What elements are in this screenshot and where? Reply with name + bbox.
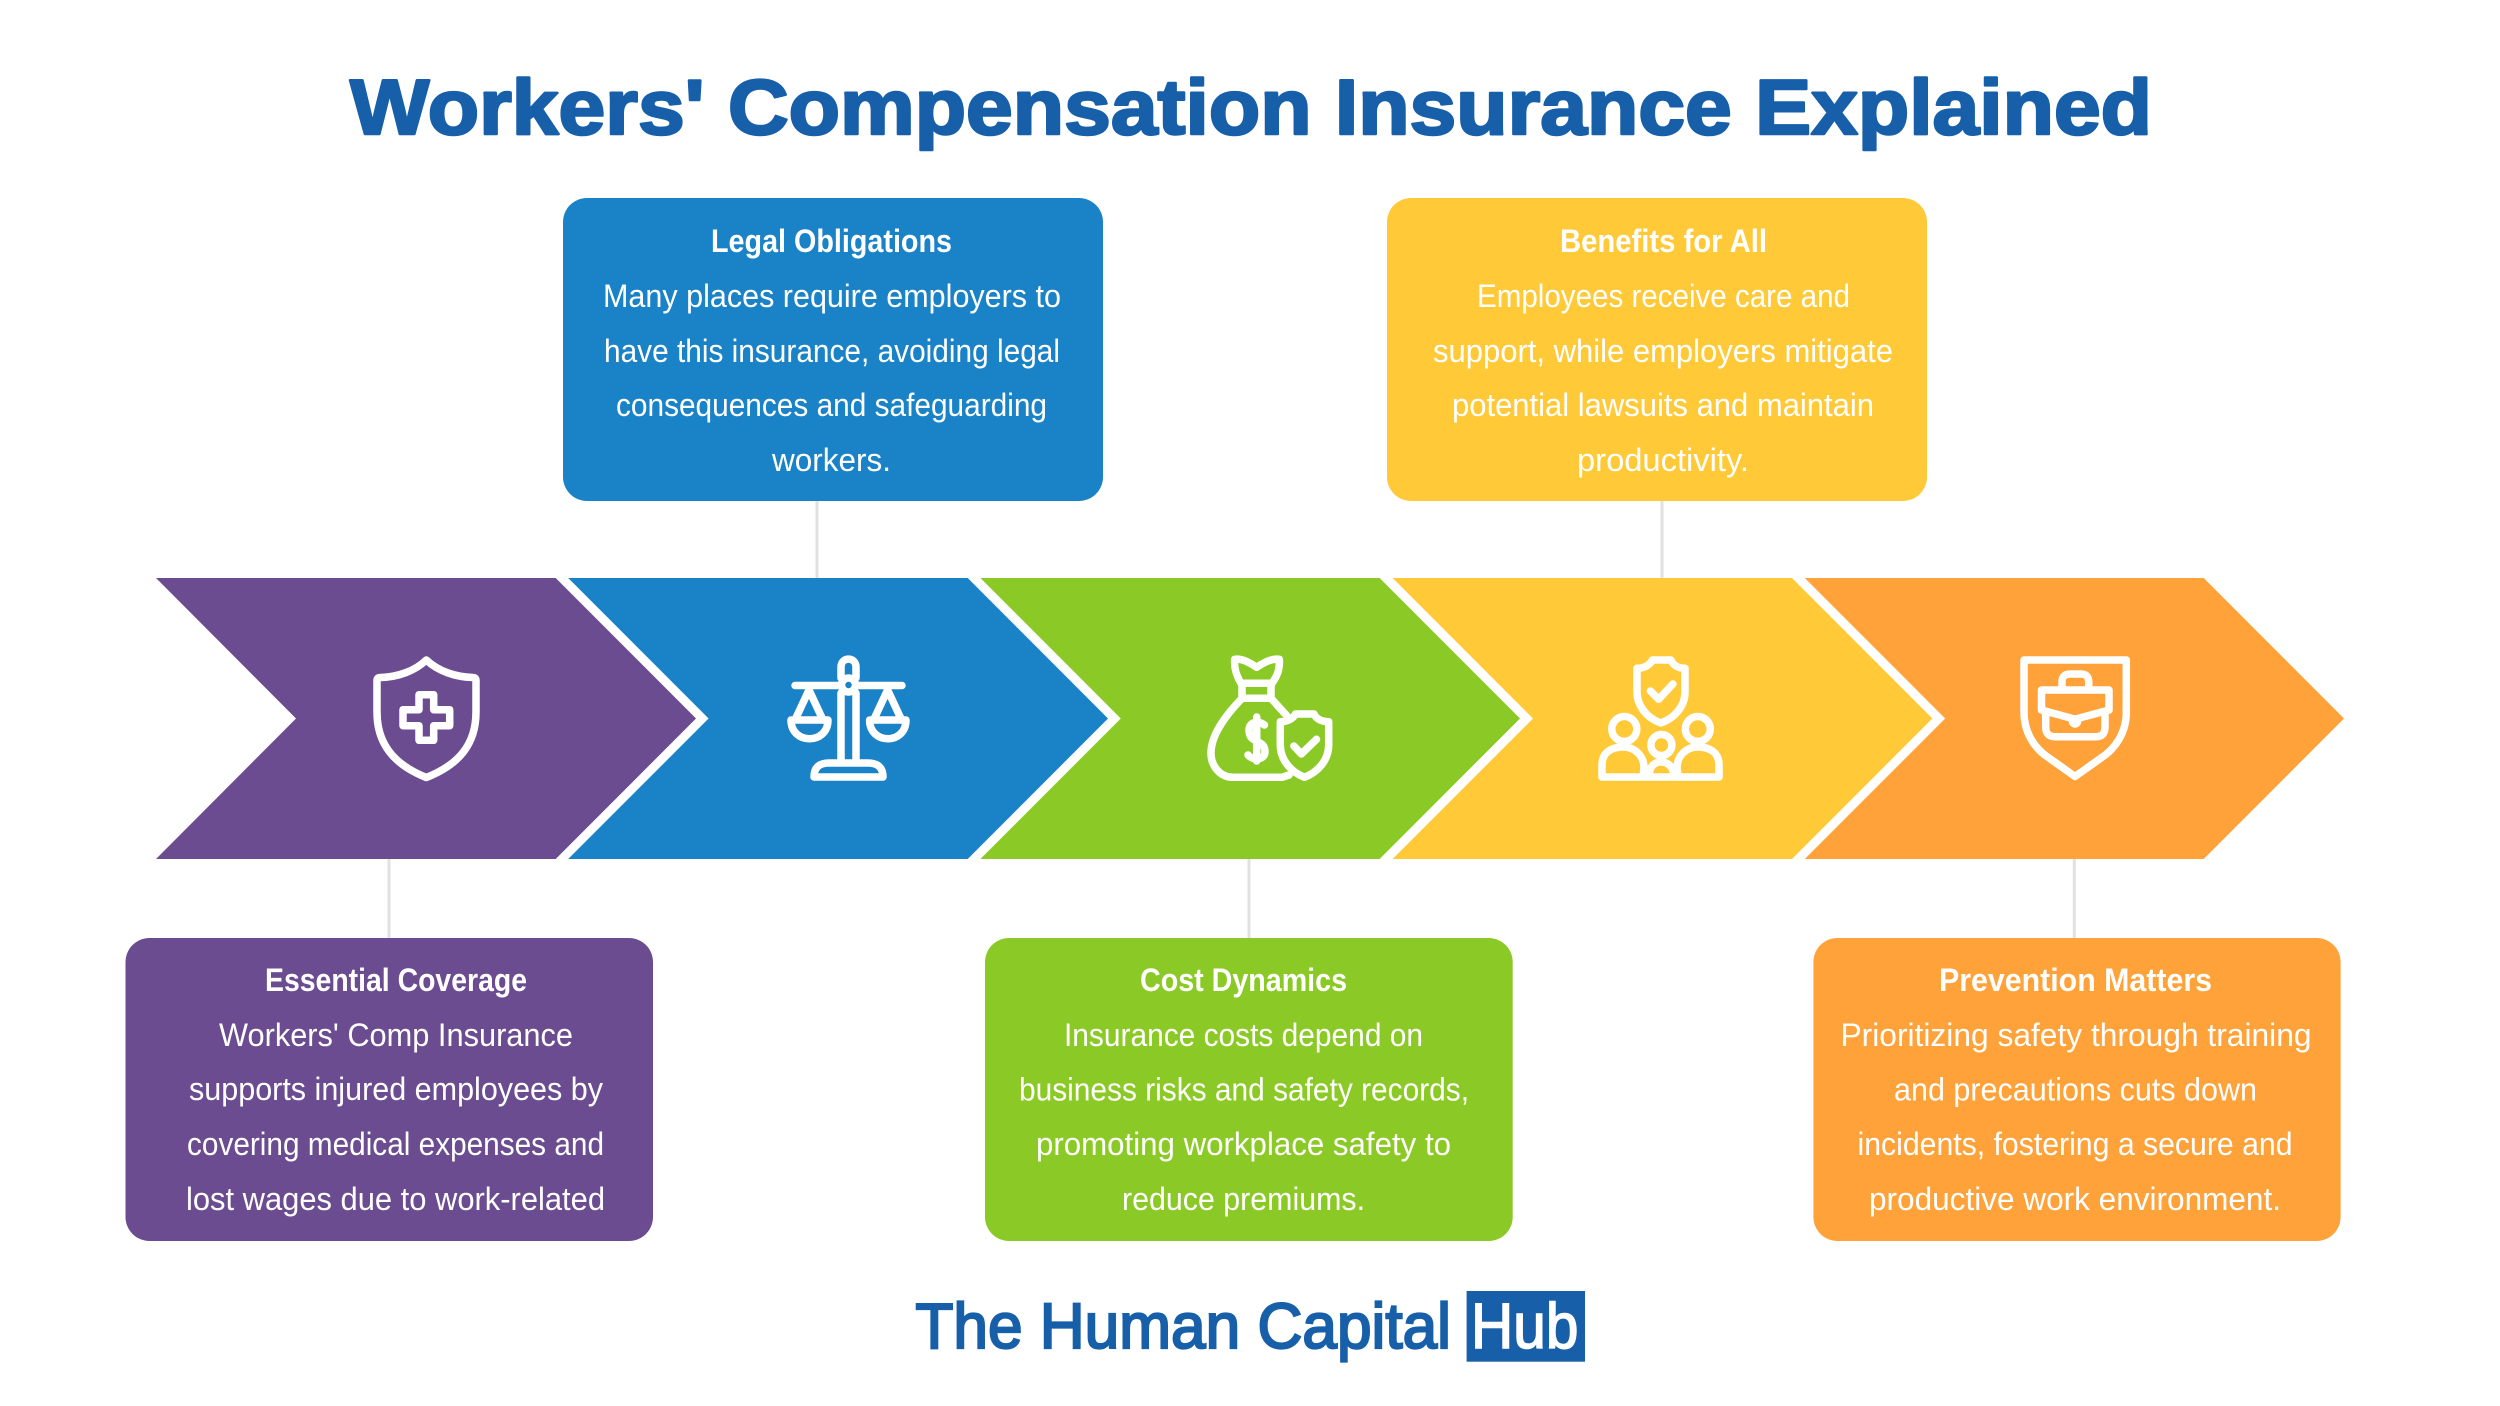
body text: benefits for all: support, while employers mitigate: [1433, 333, 1893, 369]
body text: legal obligations: Many places require employers to: [603, 278, 1061, 314]
body text: cost dynamics: reduce premiums.: [1122, 1181, 1365, 1217]
body text: prevention matters: and precautions cuts down: [1894, 1072, 2257, 1108]
body text: essential coverage: covering medical expenses and: [187, 1126, 604, 1162]
body text: cost dynamics: promoting workplace safety to: [1036, 1126, 1451, 1162]
panel: benefits for all: [1387, 198, 1927, 501]
body text: essential coverage: lost wages due to work-related: [186, 1181, 605, 1217]
heading: benefits for all: Benefits for All: [1560, 223, 1767, 259]
heading: legal obligations: Legal Obligations: [711, 223, 952, 259]
body text: legal obligations: [603, 278, 1061, 478]
connectors between chevrons and panels: [388, 497, 2076, 938]
body text: cost dynamics: business risks and safety records,: [1019, 1072, 1469, 1108]
icon: shield with medical cross: [377, 660, 476, 778]
icon: shield with briefcase: [2024, 660, 2126, 776]
icon: shield over group of people: [1602, 660, 1719, 777]
icon: money bag with shield: [1211, 659, 1329, 777]
chevron process band: [156, 578, 2344, 859]
body text: prevention matters: productive work environment.: [1869, 1181, 2281, 1217]
body text: benefits for all: productivity.: [1577, 442, 1749, 478]
heading: cost dynamics: Cost Dynamics: [1140, 962, 1347, 998]
logo: The Human Capital Hub: The Human Capital: [915, 1290, 1451, 1362]
body text: prevention matters: incidents, fostering a secure and: [1858, 1126, 2292, 1162]
panel: legal obligations: [563, 198, 1103, 501]
body text: essential coverage: Workers' Comp Insurance: [219, 1017, 573, 1053]
body text: legal obligations: workers.: [771, 442, 891, 478]
chevron: yellow: [1393, 578, 1932, 859]
body text: cost dynamics: Insurance costs depend on: [1064, 1017, 1423, 1053]
chevron: green: [980, 578, 1520, 859]
icon: scales of justice: [791, 659, 906, 777]
body text: benefits for all: [1433, 278, 1893, 478]
body text: legal obligations: have this insurance, avoiding legal: [604, 333, 1060, 369]
panel: cost dynamics: [985, 938, 1513, 1241]
body text: legal obligations: consequences and safeguarding: [616, 387, 1047, 423]
body text: benefits for all: Employees receive care and: [1477, 278, 1850, 314]
panel: prevention matters: [1813, 938, 2341, 1241]
body text: essential coverage: [186, 1017, 605, 1217]
body text: prevention matters: [1840, 1017, 2312, 1217]
heading: prevention matters: Prevention Matters: [1939, 962, 2212, 998]
body text: essential coverage: supports injured employees by: [189, 1071, 603, 1107]
logo: The Human Capital Hub: Hub: [1471, 1290, 1578, 1362]
chevron: orange: [1805, 578, 2344, 859]
chevron: blue: [568, 578, 1108, 859]
panel: essential coverage: [126, 938, 653, 1241]
heading: essential coverage: Essential Coverage: [265, 962, 527, 998]
title: Workers' Compensation Insurance Explained: [350, 63, 2152, 151]
body text: cost dynamics: [1019, 1017, 1469, 1217]
body text: benefits for all: potential lawsuits and maintain: [1452, 387, 1874, 423]
body text: prevention matters: Prioritizing safety through training: [1840, 1017, 2312, 1053]
chevron: purple: [156, 578, 696, 859]
